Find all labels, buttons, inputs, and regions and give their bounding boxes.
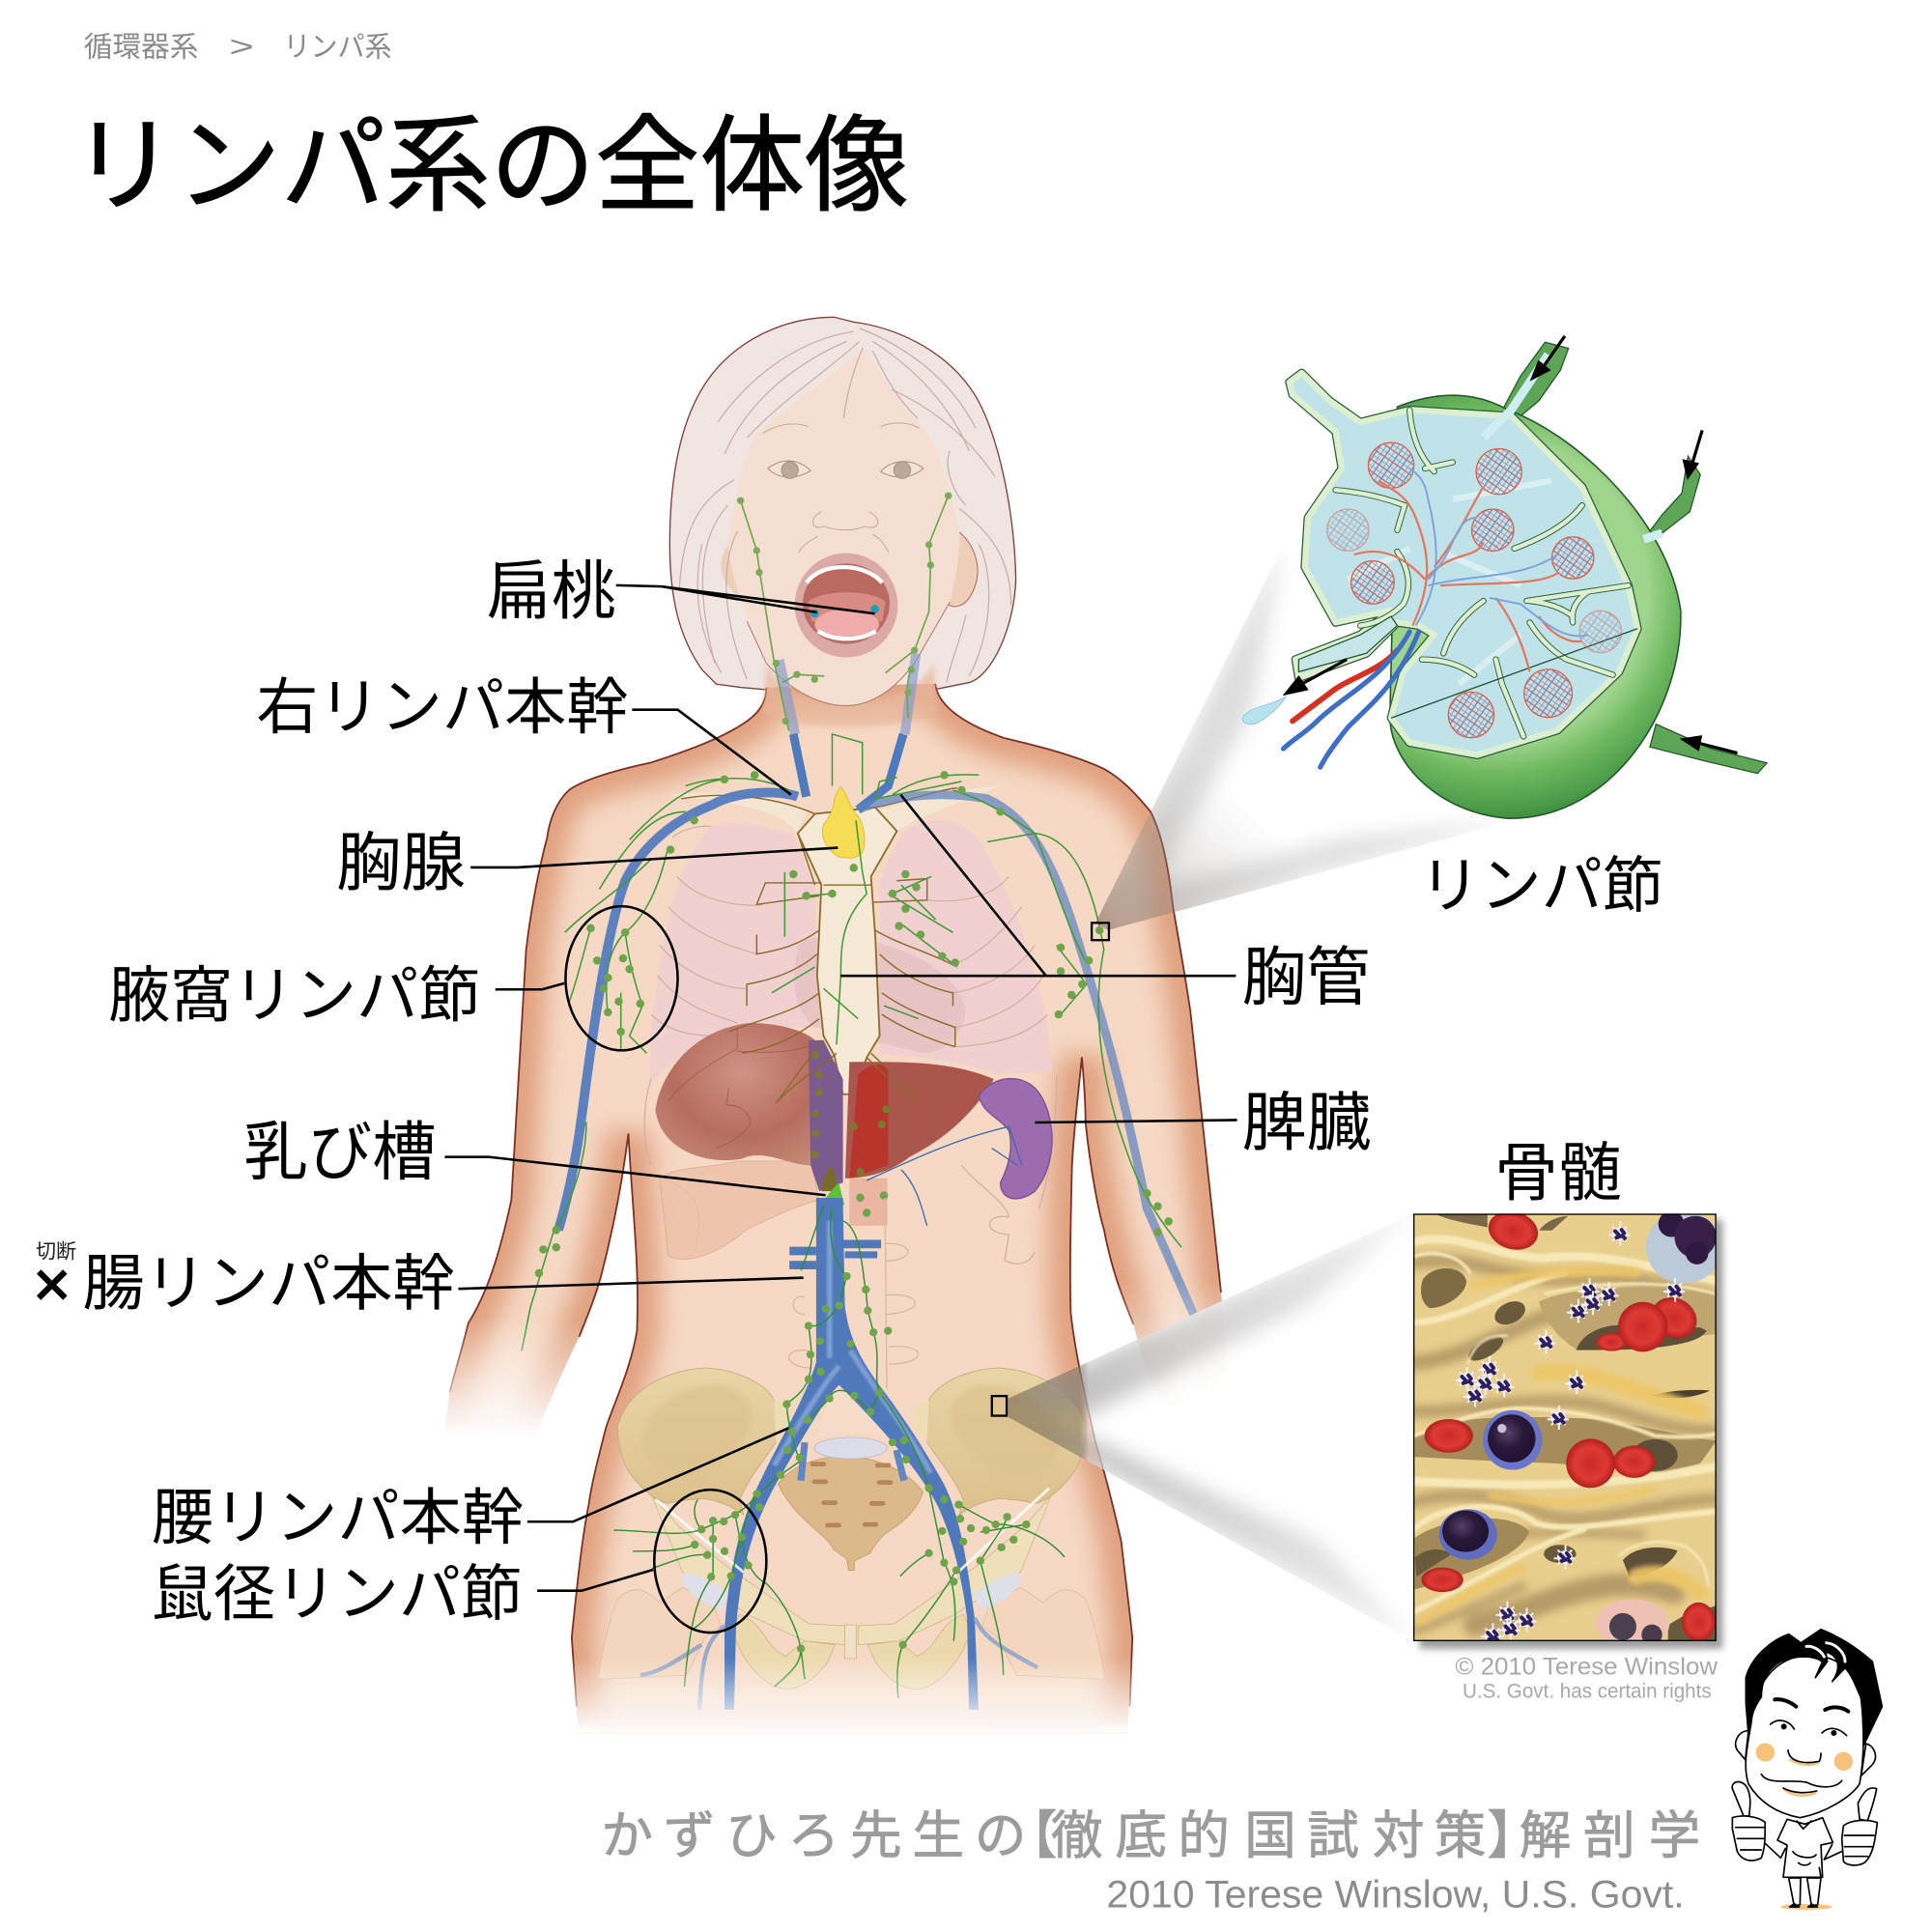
mascot brows [1775,1699,1848,1712]
breadcrumb: > [229,31,254,64]
mascot cheeks [1765,1752,1843,1761]
mascot face [1746,1655,1863,1818]
sacral disc [814,1437,887,1459]
sacrum [778,1457,923,1571]
macrophage [1646,1211,1722,1284]
cisterna chyli green [824,1182,844,1212]
bottom fade solid [542,1734,1171,1752]
neck veins [780,654,916,734]
red vessels [1354,481,1582,671]
face lymph vessels [741,496,949,731]
bone strands highlights [1413,1239,1717,1612]
label: cut note: 切断 [36,1239,76,1263]
costal cartilages [681,788,957,1103]
label: inguinal nodes: 鼠径リンパ節 [152,1559,523,1629]
cheeks blush [780,481,911,568]
mascot right fist [1842,1820,1877,1865]
cut plane [1391,629,1637,718]
green lymph vessels chest [522,734,1181,1350]
marrow border [1413,1213,1717,1641]
artery red [1293,650,1397,721]
mascot left fist [1732,1816,1765,1861]
label: lymph node: リンパ節 [1419,851,1663,921]
heart shade [794,936,966,1053]
chin shadow [763,664,937,726]
mascot ears [1736,1731,1875,1776]
mouth [795,554,897,658]
zoom cone: lymph node [1095,568,1468,930]
mascot eyes [1771,1720,1847,1736]
node wall outline [1290,373,1637,755]
hair strands [679,328,1011,683]
clavicles [668,786,1001,834]
face lymph nodes [741,496,949,722]
figure: female torso with lymphatic system [419,317,1244,1752]
label: right lymphatic duct: 右リンパ本幹 [256,672,629,742]
copyright note: © 2010 Terese Winslow [1455,1653,1719,1680]
right arm fade [1115,1282,1244,1417]
lung rib lines [644,826,1057,1264]
left hip bones [599,1368,845,1689]
stomach region [660,1161,819,1259]
label: thoracic duct: 胸管 [1242,942,1370,1013]
left lung [650,823,819,1084]
breadcrumb: 循環器系 [84,32,198,64]
head details [679,328,1011,734]
green nodes chest [539,775,1169,1273]
internal iliac veins [801,1442,904,1481]
eyes [768,461,923,478]
aorta red [849,1065,889,1179]
follicles [1327,442,1622,738]
aorta lower [849,1179,888,1226]
sternum [798,808,896,1094]
white blood cell 1 [1483,1410,1543,1470]
tonsils [814,610,875,613]
label: intestinal trunk: 腸リンパ本幹 [82,1249,455,1319]
lower branches [640,1618,1037,1710]
thymus [822,786,865,858]
mascot nose and mouth [1761,1750,1842,1793]
inguinal ligament highlights [656,1489,1049,1577]
label: bone marrow: 骨髄 [1494,1138,1622,1209]
arm vein right side of image left [558,792,798,1230]
tan shading bands [1413,1261,1717,1632]
marrow panel [1413,1213,1717,1641]
green beads on dark [815,1056,886,1172]
mascot right thumb [1858,1788,1877,1821]
footer credit: 2010 Terese Winslow, U.S. Govt. [1106,1873,1685,1916]
green nodes pelvis [695,1276,1026,1649]
cistern and beads [821,1165,837,1191]
granulocyte [1596,1599,1669,1648]
right lung [880,820,1052,1075]
label: thymus: 胸腺 [336,828,466,899]
mascot nose shade [1784,1760,1818,1796]
sacrum top [816,1385,887,1438]
mascot feet [1790,1904,1817,1907]
label: spleen: 脾臓 [1242,1088,1372,1159]
title: リンパ系の全体像 [71,107,909,224]
body silhouette [443,684,1233,1744]
liver rib lines [668,1028,815,1149]
marrow shadow [1419,1220,1722,1649]
leader lines [444,585,1237,1633]
skin edge shading [443,684,1233,1744]
lumbar vertebrae [789,1198,918,1389]
white blood cell 2 [1439,1509,1497,1560]
liver right lobe [845,1062,994,1179]
vessels stubs [1495,342,1767,774]
left arm fade solid [419,1435,585,1479]
spleen [979,1078,1052,1199]
copyright note: U.S. Govt. has certain rights [1463,1681,1712,1703]
lymph droplet [1242,696,1287,724]
face outline lower [747,602,950,706]
illustration: bone marrow [1413,1206,1722,1649]
vein blue 1 [1283,632,1409,749]
breadcrumb [84,31,392,64]
pelvis and abdomen [599,1198,1104,1710]
platelets [1456,1221,1685,1647]
node wall pale [1290,373,1637,755]
mascot hair [1746,1630,1882,1746]
breadcrumb: リンパ系 [283,32,392,64]
trabeculae [1336,410,1629,736]
spleen vessels [867,1126,1022,1226]
efferent lymph [1298,616,1397,671]
zoom cone: bone marrow [1009,1230,1388,1623]
liver left lobe [655,1023,815,1165]
mascot left thumb [1732,1782,1750,1816]
arm vein far side [858,795,1194,1317]
mascot pupils [1784,1726,1833,1733]
flow arrows [1287,336,1737,753]
face [727,348,959,706]
mascot coat [1777,1818,1833,1877]
right arm fade solid [1115,1417,1244,1479]
label: intestinal trunk: × [33,1249,71,1321]
sacral foramina [812,1464,891,1525]
torso anatomy [522,734,1194,1350]
jugular veins [793,734,903,810]
label: tonsil: 扁桃 [487,556,616,628]
mascot shadow [1780,1904,1833,1910]
bottom fade [542,1658,1171,1734]
node shell [1390,395,1681,818]
highlights in sinus [1348,481,1551,684]
body outline [450,684,1221,1707]
right ear [947,529,978,607]
marker: bone square [992,1396,1007,1416]
mascot: doctor thumbs up [1732,1630,1882,1910]
right hip bones [858,1368,1104,1689]
copyright note [1455,1653,1719,1703]
vein blue 2 [1321,632,1419,767]
mascot legs [1789,1878,1821,1906]
illustration: lymph node cross-section [1242,336,1767,818]
dark cavities [1415,1214,1717,1641]
blue iliac veins [724,1198,979,1710]
label: axillary nodes: 腋窩リンパ節 [108,960,480,1030]
mascot arms [1765,1843,1842,1860]
red blood cells [1421,1206,1716,1641]
hair back [669,317,1016,690]
left ear [721,541,747,595]
afferent channels [1484,355,1662,539]
yellow texture [1420,1271,1700,1622]
lower left cavity [1415,1519,1529,1589]
label: cisterna chyli: 乳び槽 [244,1118,437,1189]
tan bulk behind cavities [1539,1287,1717,1350]
vein highlight [774,1221,931,1473]
renal vein stubs [789,1240,881,1269]
label: lumbar trunk: 腰リンパ本幹 [152,1483,524,1552]
mascot hair highlights [1806,1643,1845,1662]
blue vessels in node [1409,469,1588,636]
left arm fade [419,1319,579,1435]
mascot coat folds [1793,1821,1821,1877]
green lymph vessels pelvis [613,1206,1065,1698]
vena cava purple [809,1040,843,1191]
mid cavity band [1415,1417,1717,1473]
nose and brows [763,423,920,553]
footer channel name: かずひろ先生の【徹底的国試対策】解剖学 [601,1807,1700,1864]
pubic symphysis [845,1625,856,1659]
marker: lymph node square [1092,923,1109,940]
